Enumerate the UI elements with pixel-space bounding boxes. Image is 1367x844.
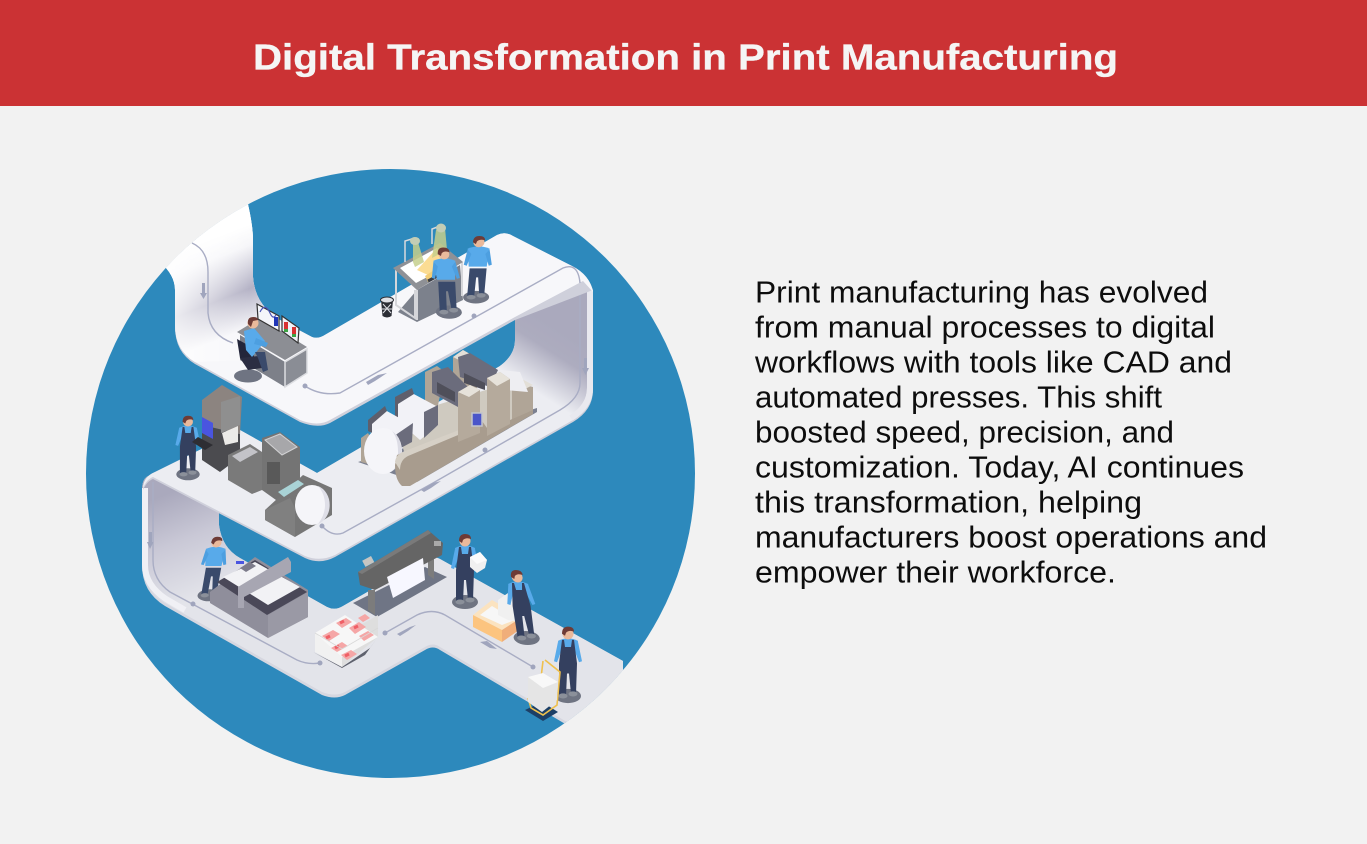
body text paragraph: boosted speed, precision, and (755, 414, 1174, 450)
worker carrying box (451, 534, 487, 609)
title: Digital Transformation in Print Manufacturing (253, 36, 1118, 78)
header banner (0, 0, 1367, 106)
body text paragraph: from manual processes to digital (755, 310, 1215, 344)
operator control desk (237, 304, 307, 387)
wide-format printer (353, 530, 447, 617)
office chair (234, 339, 262, 382)
roll unit (265, 475, 332, 537)
small printing unit (228, 444, 262, 494)
worker pushing hand truck (554, 627, 582, 703)
hand truck with box (525, 660, 560, 721)
isometric factory illustration (86, 169, 695, 778)
terminal cabinet (192, 385, 242, 472)
pallet of pink-printed boxes (313, 614, 378, 668)
drafting table (393, 224, 463, 322)
flatbed cutter (210, 557, 308, 638)
body text paragraph: empower their workforce. (755, 554, 1116, 590)
body text paragraph: this transformation, helping (755, 484, 1142, 520)
body text paragraph: workflows with tools like CAD and (754, 344, 1232, 380)
ribbon and factory scene (142, 200, 623, 745)
body text paragraph: Print manufacturing has evolved (755, 274, 1208, 310)
flatbed cutter operator (198, 536, 226, 602)
middle ribbon floor and right wall (143, 278, 593, 561)
body text paragraph: manufacturers boost operations and (755, 520, 1267, 554)
colleague standing with hand on chin (462, 236, 493, 304)
blue circle background (86, 169, 695, 778)
mid-level operator at terminal (175, 416, 201, 480)
press machine (358, 350, 537, 486)
seated operator (244, 317, 268, 372)
body text paragraph: automated presses. This shift (755, 380, 1162, 414)
cabinet unit (262, 432, 300, 505)
body text paragraph (754, 274, 1267, 590)
worker packing box (507, 570, 540, 645)
top ribbon floor and left wall (160, 200, 593, 426)
lower ribbon floor (142, 475, 623, 745)
designer standing at table (432, 248, 462, 319)
flow arrows and dots (147, 283, 589, 670)
open cardboard box (473, 593, 517, 642)
body text paragraph: customization. Today, AI continues (755, 450, 1244, 484)
waste bin (380, 297, 394, 318)
